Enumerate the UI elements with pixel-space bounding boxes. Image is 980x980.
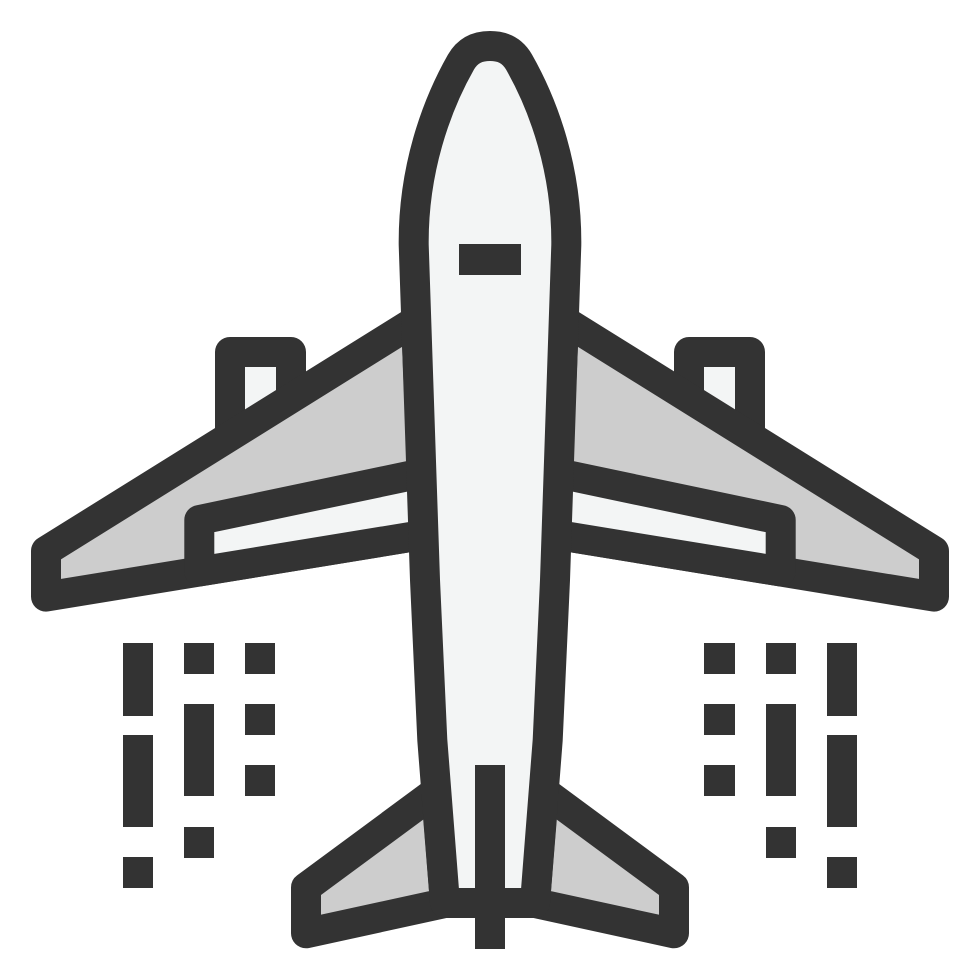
right wing [555,320,934,597]
right flap [555,473,781,572]
left engine [230,352,291,440]
right tail fin [535,792,674,933]
tail centre line [475,765,505,949]
cockpit window [459,244,521,275]
right engine [689,352,750,440]
left tail fin [306,792,445,933]
right trails [704,643,857,888]
fuselage [414,46,566,903]
left wing [46,320,425,597]
left trails [123,643,275,888]
left flap [199,473,425,572]
